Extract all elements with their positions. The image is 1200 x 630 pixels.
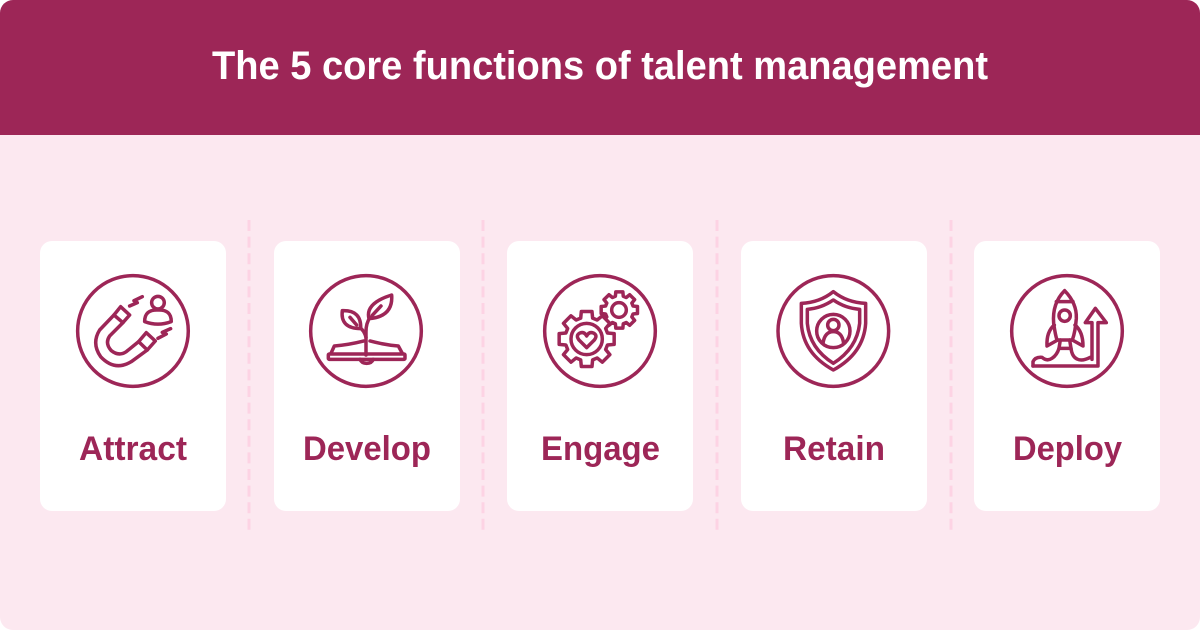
panel: Deploy [974, 241, 1160, 511]
label: Retain: Retain [783, 430, 885, 468]
icon: plant growing from book [311, 276, 421, 386]
panel: Retain [741, 241, 927, 511]
label: Develop: Develop [303, 430, 431, 468]
label: Deploy: Deploy [1013, 430, 1122, 468]
icon: shield with person [778, 276, 889, 386]
label: Engage: Engage [541, 430, 660, 468]
panel: Engage [507, 241, 693, 511]
header banner [0, 0, 1200, 135]
label: Attract: Attract [79, 430, 187, 468]
title: The 5 core functions of talent management [212, 44, 988, 88]
panel: Attract [40, 241, 226, 511]
icon: magnet attracting person [78, 276, 188, 386]
icon: rocket launch with arrow [1012, 276, 1122, 386]
panel: Develop [274, 241, 460, 511]
icon: gears with heart [545, 276, 655, 386]
